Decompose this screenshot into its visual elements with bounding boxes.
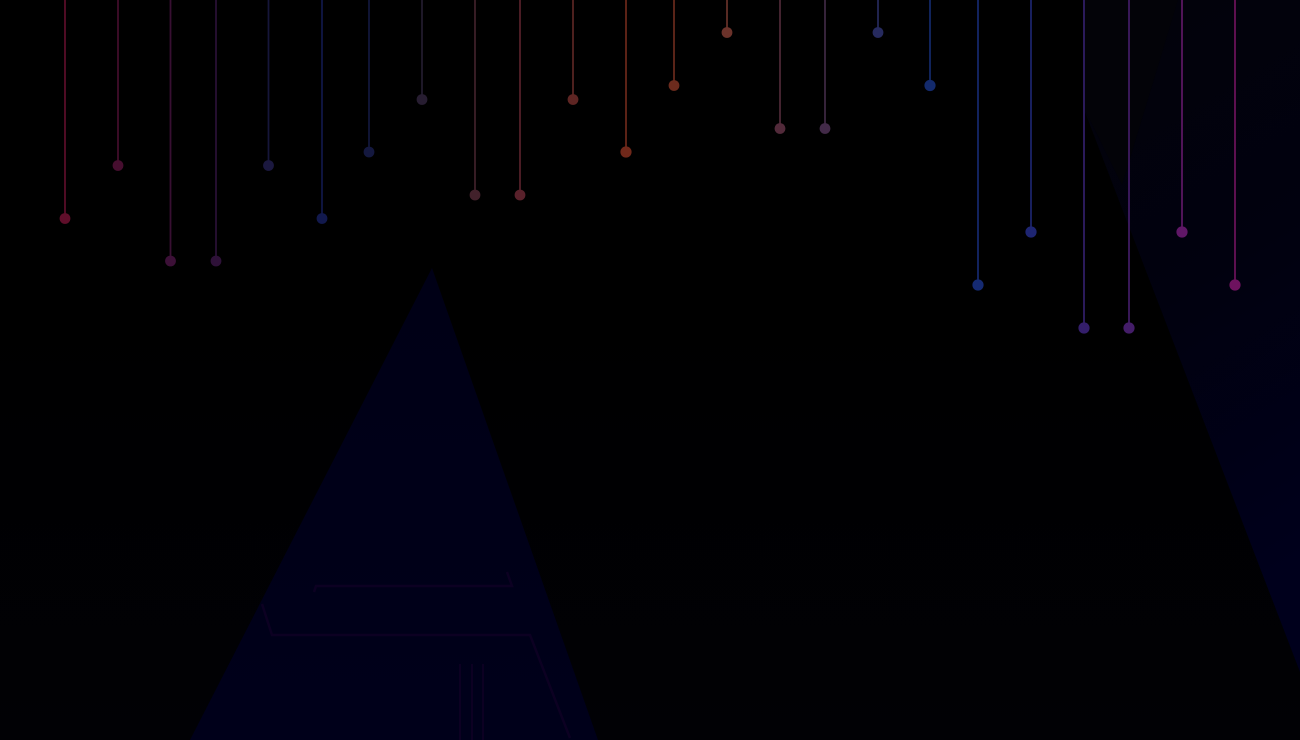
line 11 [568,0,578,105]
triangle: main centre-left [190,268,598,740]
line 8 [417,0,427,105]
line 9 [470,0,480,200]
line 15 [775,0,785,134]
line 23 [1176,0,1188,238]
line 1 [60,0,70,224]
line 20 [1025,0,1037,238]
line 4 [211,0,221,266]
line 16 [820,0,830,134]
line 21 [1078,0,1090,334]
line 3 [165,0,176,266]
faint circuit lines inside main triangle [262,572,570,740]
line 12 [620,0,632,158]
triangle: right [1085,0,1300,672]
line 7 [364,0,374,157]
line 18 [924,0,936,91]
line 2 [113,0,123,171]
line 17 [873,0,883,38]
line 13 [669,0,679,91]
faint triangle: top right [1085,0,1178,185]
line 10 [515,0,525,200]
line 19 [972,0,984,291]
faint glow: lower background [0,300,1300,740]
line 6 [317,0,327,224]
hanging lines with dots [60,0,1241,334]
line 14 [722,0,732,38]
line 22 [1123,0,1135,334]
line 5 [263,0,274,171]
line 24 [1229,0,1241,291]
